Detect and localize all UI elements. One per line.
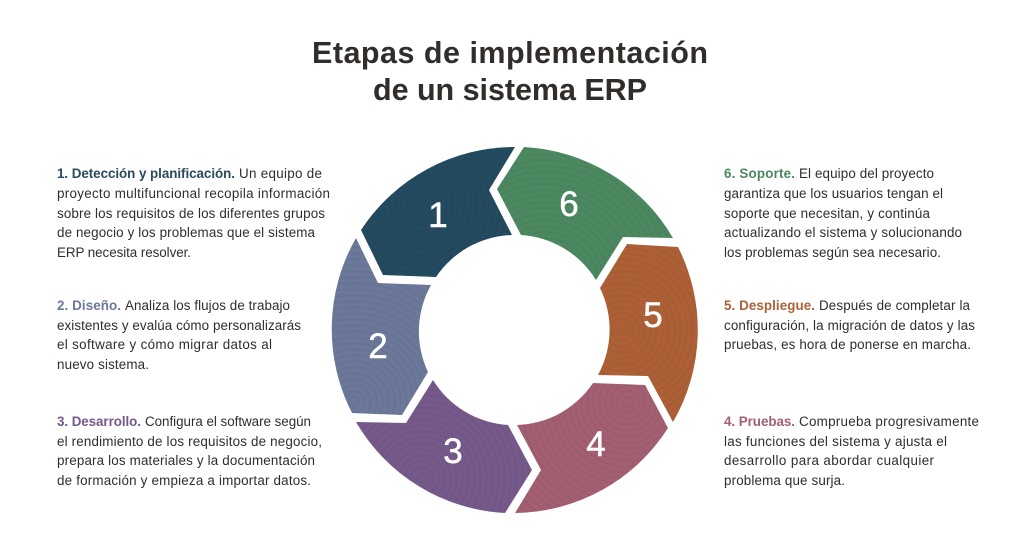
text block: step 2: nuevo sistema. — [57, 357, 149, 372]
text block: step 1: ERP necesita resolver. — [57, 245, 191, 260]
ring chart — [332, 147, 698, 513]
text block: step 3: de formación y empieza a importar datos. — [57, 473, 311, 488]
title: Etapas de implementación — [312, 36, 708, 70]
segment 5: 5 — [643, 296, 663, 335]
segment 3 — [356, 380, 532, 513]
text block: step 4: problema que surja. — [724, 473, 845, 488]
text block: step 4: 4. Pruebas. — [724, 414, 795, 429]
text block: step 1: sobre los requisitos de los diferentes grupos — [57, 206, 325, 221]
segment 2: 2 — [368, 327, 388, 366]
text block: step 2: existentes y evalúa cómo personalizarás — [57, 318, 301, 333]
text block: step 5: pruebas, es hora de ponerse en marcha. — [724, 337, 971, 352]
text block: step 4 — [724, 414, 979, 488]
segment 3: 3 — [443, 432, 463, 471]
text block: step 3 — [57, 414, 322, 488]
text block: step 3: 3. Desarrollo. — [57, 414, 141, 429]
text block: step 1: proyecto multifuncional recopila información — [57, 186, 330, 201]
text block: step 6: los problemas según sea necesario. — [724, 245, 941, 260]
text block: step 1 — [57, 166, 330, 260]
title: de un sistema ERP — [373, 73, 647, 107]
text block: step 6: El equipo del proyecto — [799, 166, 934, 181]
text block: step 3: Configura el software según — [145, 414, 311, 429]
text block: step 1: Un equipo de — [239, 166, 322, 181]
segment 4 — [515, 383, 668, 513]
text block: step 2: Analiza los flujos de trabajo — [125, 298, 290, 313]
text block: step 2 — [57, 298, 301, 372]
segment 2 — [332, 238, 431, 415]
text block: step 6: garantiza que los usuarios tengan el — [724, 186, 943, 201]
text block: step 2: el software y cómo migrar datos al — [57, 337, 272, 352]
segment 6: 6 — [559, 185, 579, 224]
text block: step 3: el rendimiento de los requisitos de negocio, — [57, 434, 322, 449]
text block: step 6: soporte que necesitan, y continúa — [724, 206, 931, 221]
segment 6 — [497, 147, 673, 280]
text block: step 1: 1. Detección y planificación. — [57, 166, 235, 181]
text block: step 1: de negocio y los problemas que el sistema — [57, 225, 316, 240]
text block: step 5: Después de completar la — [819, 298, 971, 313]
text block: step 2: 2. Diseño. — [57, 298, 121, 313]
segment 1: 1 — [428, 196, 448, 235]
segment 1 — [361, 147, 515, 277]
text block: step 4: Comprueba progresivamente — [799, 414, 979, 429]
text block: step 6 — [724, 166, 962, 260]
title — [312, 36, 708, 107]
text block: step 5: 5. Despliegue. — [724, 298, 815, 313]
segment 5 — [598, 244, 698, 422]
segment 4: 4 — [586, 425, 606, 464]
text block: step 3: prepara los materiales y la documentación — [57, 453, 315, 468]
text block: step 4: desarrollo para abordar cualquier — [724, 453, 935, 468]
text block: step 6: 6. Soporte. — [724, 166, 795, 181]
text block: step 6: actualizando el sistema y solucionando — [724, 225, 962, 240]
text block: step 5 — [724, 298, 975, 352]
text block: step 4: las funciones del sistema y ajusta el — [724, 434, 947, 449]
text block: step 5: configuración, la migración de datos y las — [724, 318, 975, 333]
